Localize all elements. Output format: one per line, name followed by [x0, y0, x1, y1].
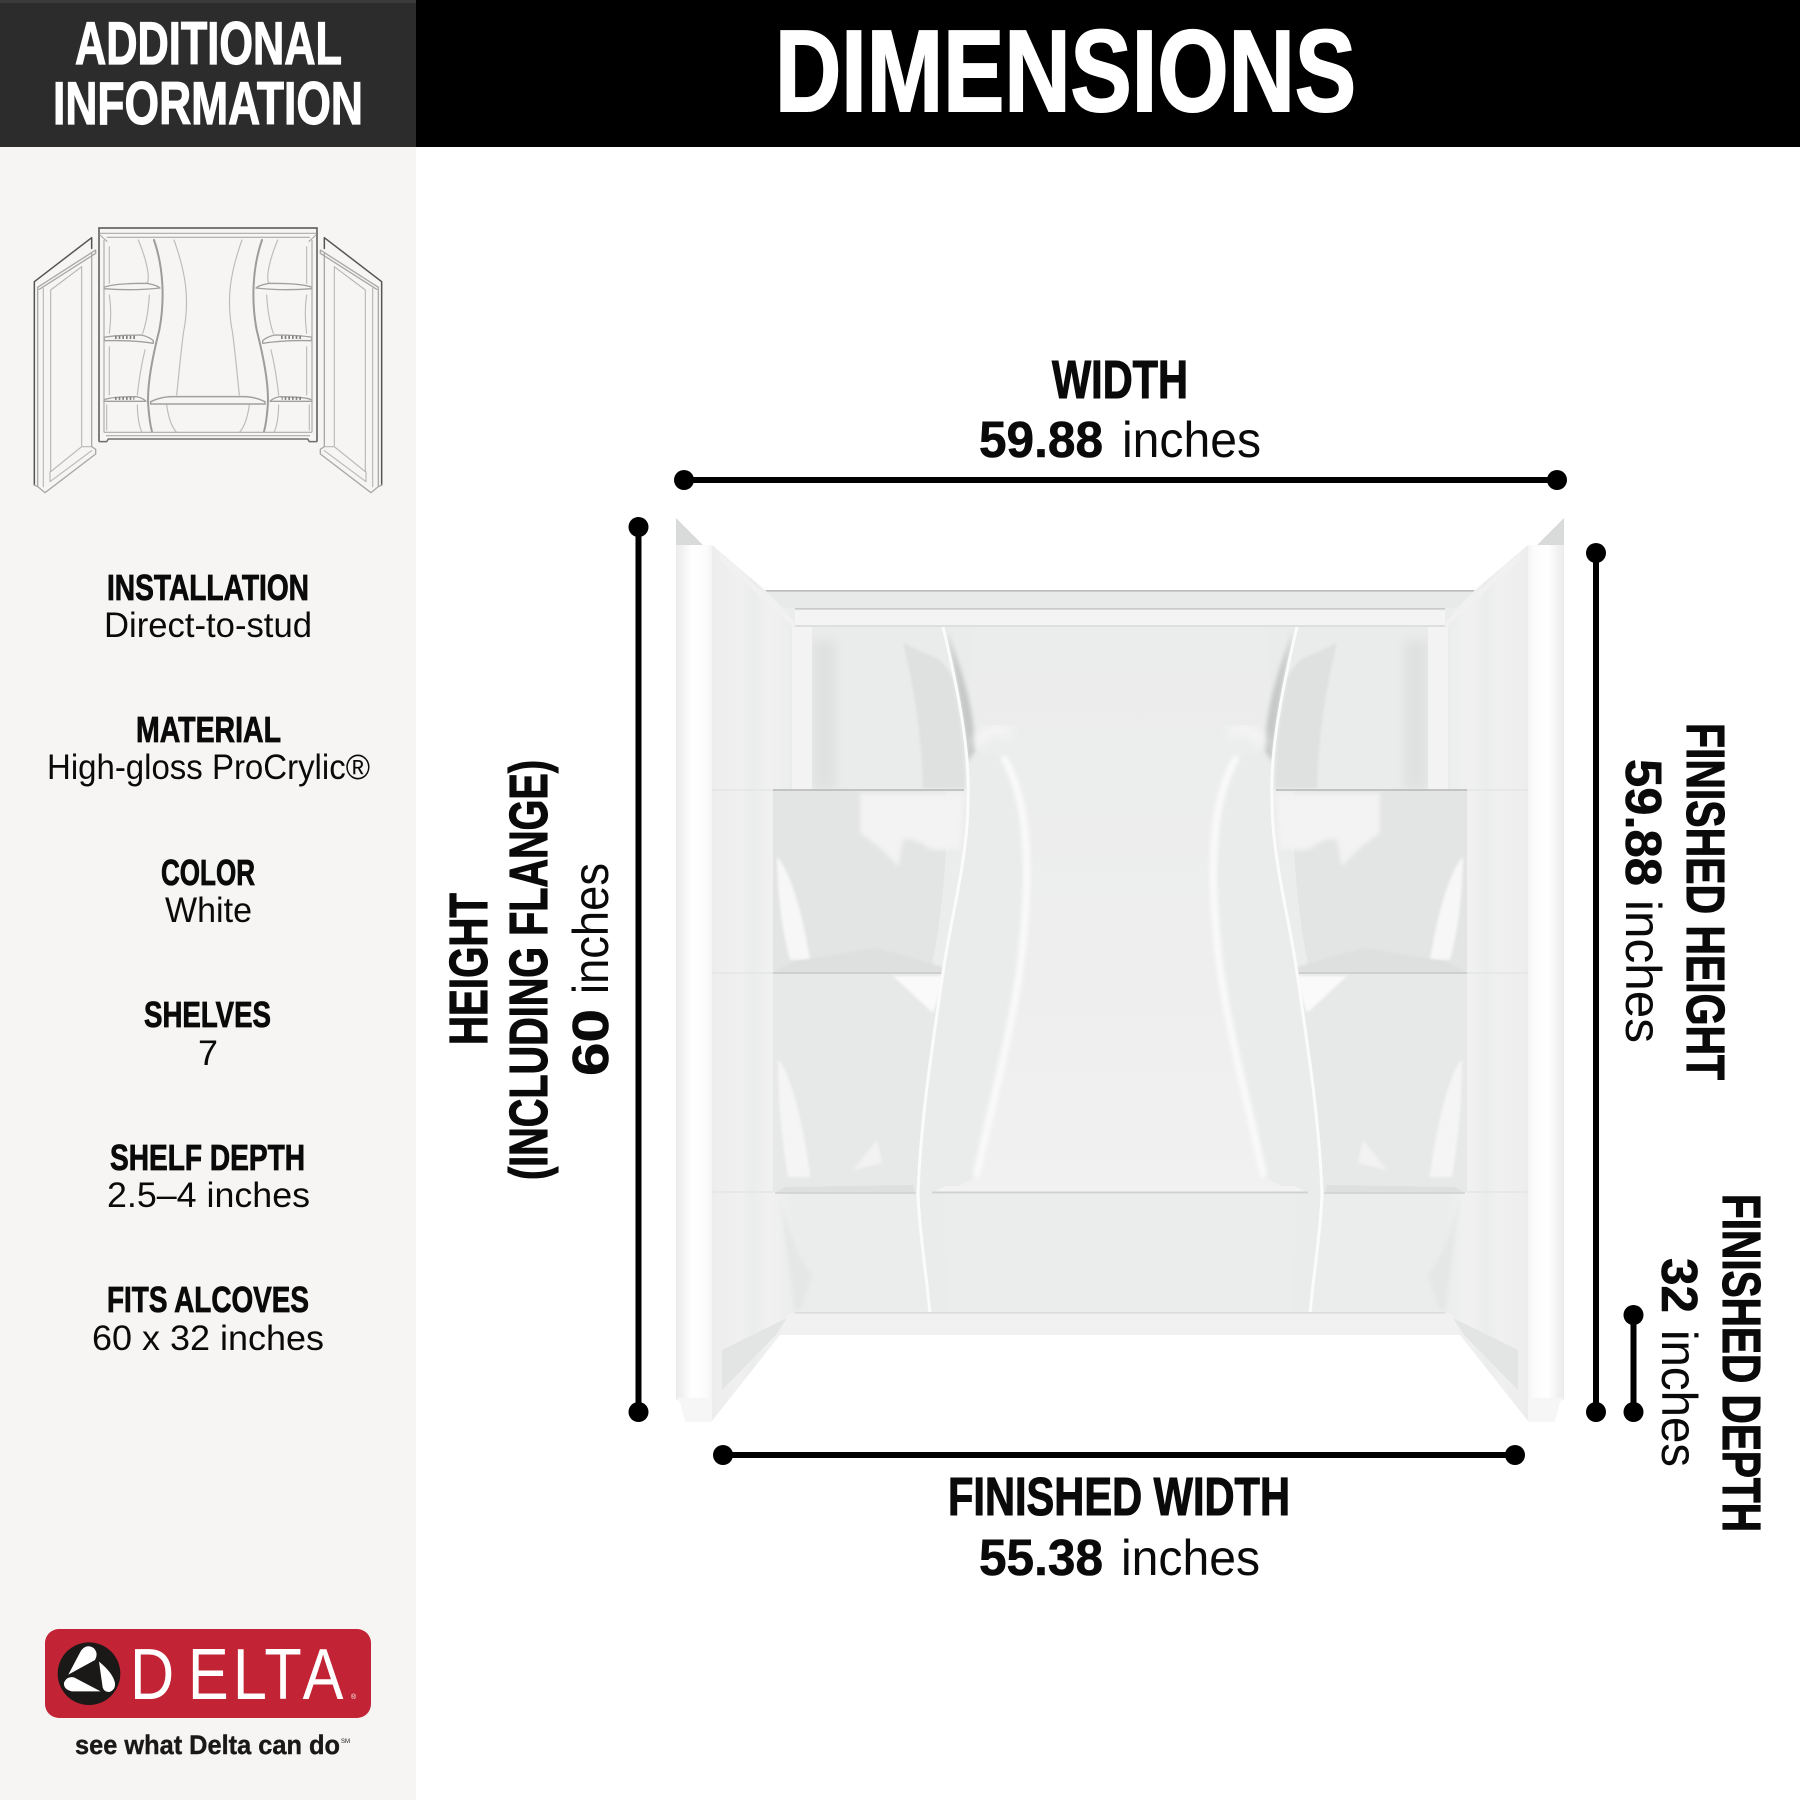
back wall top flange: [765, 590, 1475, 627]
lower apron below centre shelf: [925, 1193, 1315, 1313]
label: height including flange: HEIGHT: [439, 893, 499, 1045]
text block: installation: INSTALLATION: [107, 567, 309, 608]
panel: dimensions header: [416, 0, 1800, 147]
text block: shelves: SHELVES: [144, 994, 271, 1035]
icon: delta logo with tagline: SM: [341, 1739, 350, 1745]
panel: additional information header: [0, 0, 416, 147]
label: finished width: FINISHED WIDTH: [948, 1467, 1290, 1527]
text block: color: [161, 852, 255, 930]
dimension line: height including flange: [628, 517, 648, 1422]
icon: line drawing of the three-panel wall set: [34, 228, 382, 493]
text block: installation: Direct-to-stud: [104, 606, 312, 645]
shower wall product image: [676, 518, 1564, 1422]
heading: additional information: ADDITIONAL: [75, 10, 342, 77]
text block: material: High-gloss ProCrylic®: [47, 748, 370, 787]
label: finished depth: [1651, 1194, 1771, 1532]
text block: installation: [104, 567, 312, 645]
label: finished depth: FINISHED DEPTH: [1711, 1194, 1771, 1532]
text block: fits alcoves: 60 x 32 inches: [92, 1319, 324, 1358]
label: finished depth: inches: [1651, 1330, 1707, 1467]
text block: material: [47, 709, 370, 787]
text block: shelf depth: [107, 1137, 310, 1215]
heading: additional information: [53, 10, 363, 137]
sidebar panel background: [0, 147, 416, 1800]
label: finished height: inches: [1615, 900, 1671, 1043]
label: height including flange: [439, 760, 619, 1180]
label: width: inches: [1122, 412, 1261, 468]
text block: shelves: [144, 994, 271, 1073]
text block: fits alcoves: FITS ALCOVES: [107, 1279, 309, 1320]
text block: shelves: 7: [198, 1034, 218, 1073]
icon: delta logo with tagline: DELTA: [130, 1635, 344, 1715]
centre shelf: [932, 1186, 1308, 1193]
label: finished height: 59.88: [1615, 759, 1672, 886]
text block: color: COLOR: [161, 852, 255, 893]
icon: delta logo with tagline: [45, 1629, 371, 1760]
label: finished width: inches: [1121, 1530, 1260, 1586]
label: height including flange: (INCLUDING FLANGE): [499, 760, 559, 1180]
label: width: [979, 350, 1261, 468]
text block: material: MATERIAL: [136, 709, 281, 750]
text block: shelf depth: SHELF DEPTH: [110, 1137, 305, 1178]
dimension line: width: [674, 470, 1567, 490]
label: width: WIDTH: [1052, 350, 1188, 410]
tub lip at the bottom edge: [780, 1312, 1460, 1335]
text block: color: White: [165, 891, 252, 930]
dimension line: finished height: [1586, 543, 1606, 1422]
label: finished width: [948, 1467, 1290, 1586]
heading: dimensions: DIMENSIONS: [775, 6, 1356, 136]
centre panel: [960, 627, 1280, 1193]
text block: fits alcoves: [92, 1279, 324, 1358]
label: width: 59.88: [979, 411, 1103, 468]
heading: additional information: INFORMATION: [53, 70, 363, 137]
icon: delta logo with tagline: see what Delta can do: [75, 1730, 340, 1760]
right wall: [1213, 518, 1564, 1422]
icon: delta logo with tagline: ®: [351, 1693, 357, 1701]
label: height including flange: 60: [562, 1009, 619, 1076]
label: finished depth: 32: [1651, 1258, 1708, 1313]
label: finished height: FINISHED HEIGHT: [1675, 723, 1735, 1080]
label: height including flange: inches: [563, 863, 619, 994]
label: finished height: [1615, 723, 1735, 1080]
dimension line: finished depth: [1624, 1305, 1644, 1422]
left wall: [676, 518, 1027, 1422]
text block: shelf depth: 2.5–4 inches: [107, 1176, 310, 1215]
label: finished width: 55.38: [979, 1529, 1103, 1586]
dimension line: finished width: [713, 1445, 1525, 1465]
